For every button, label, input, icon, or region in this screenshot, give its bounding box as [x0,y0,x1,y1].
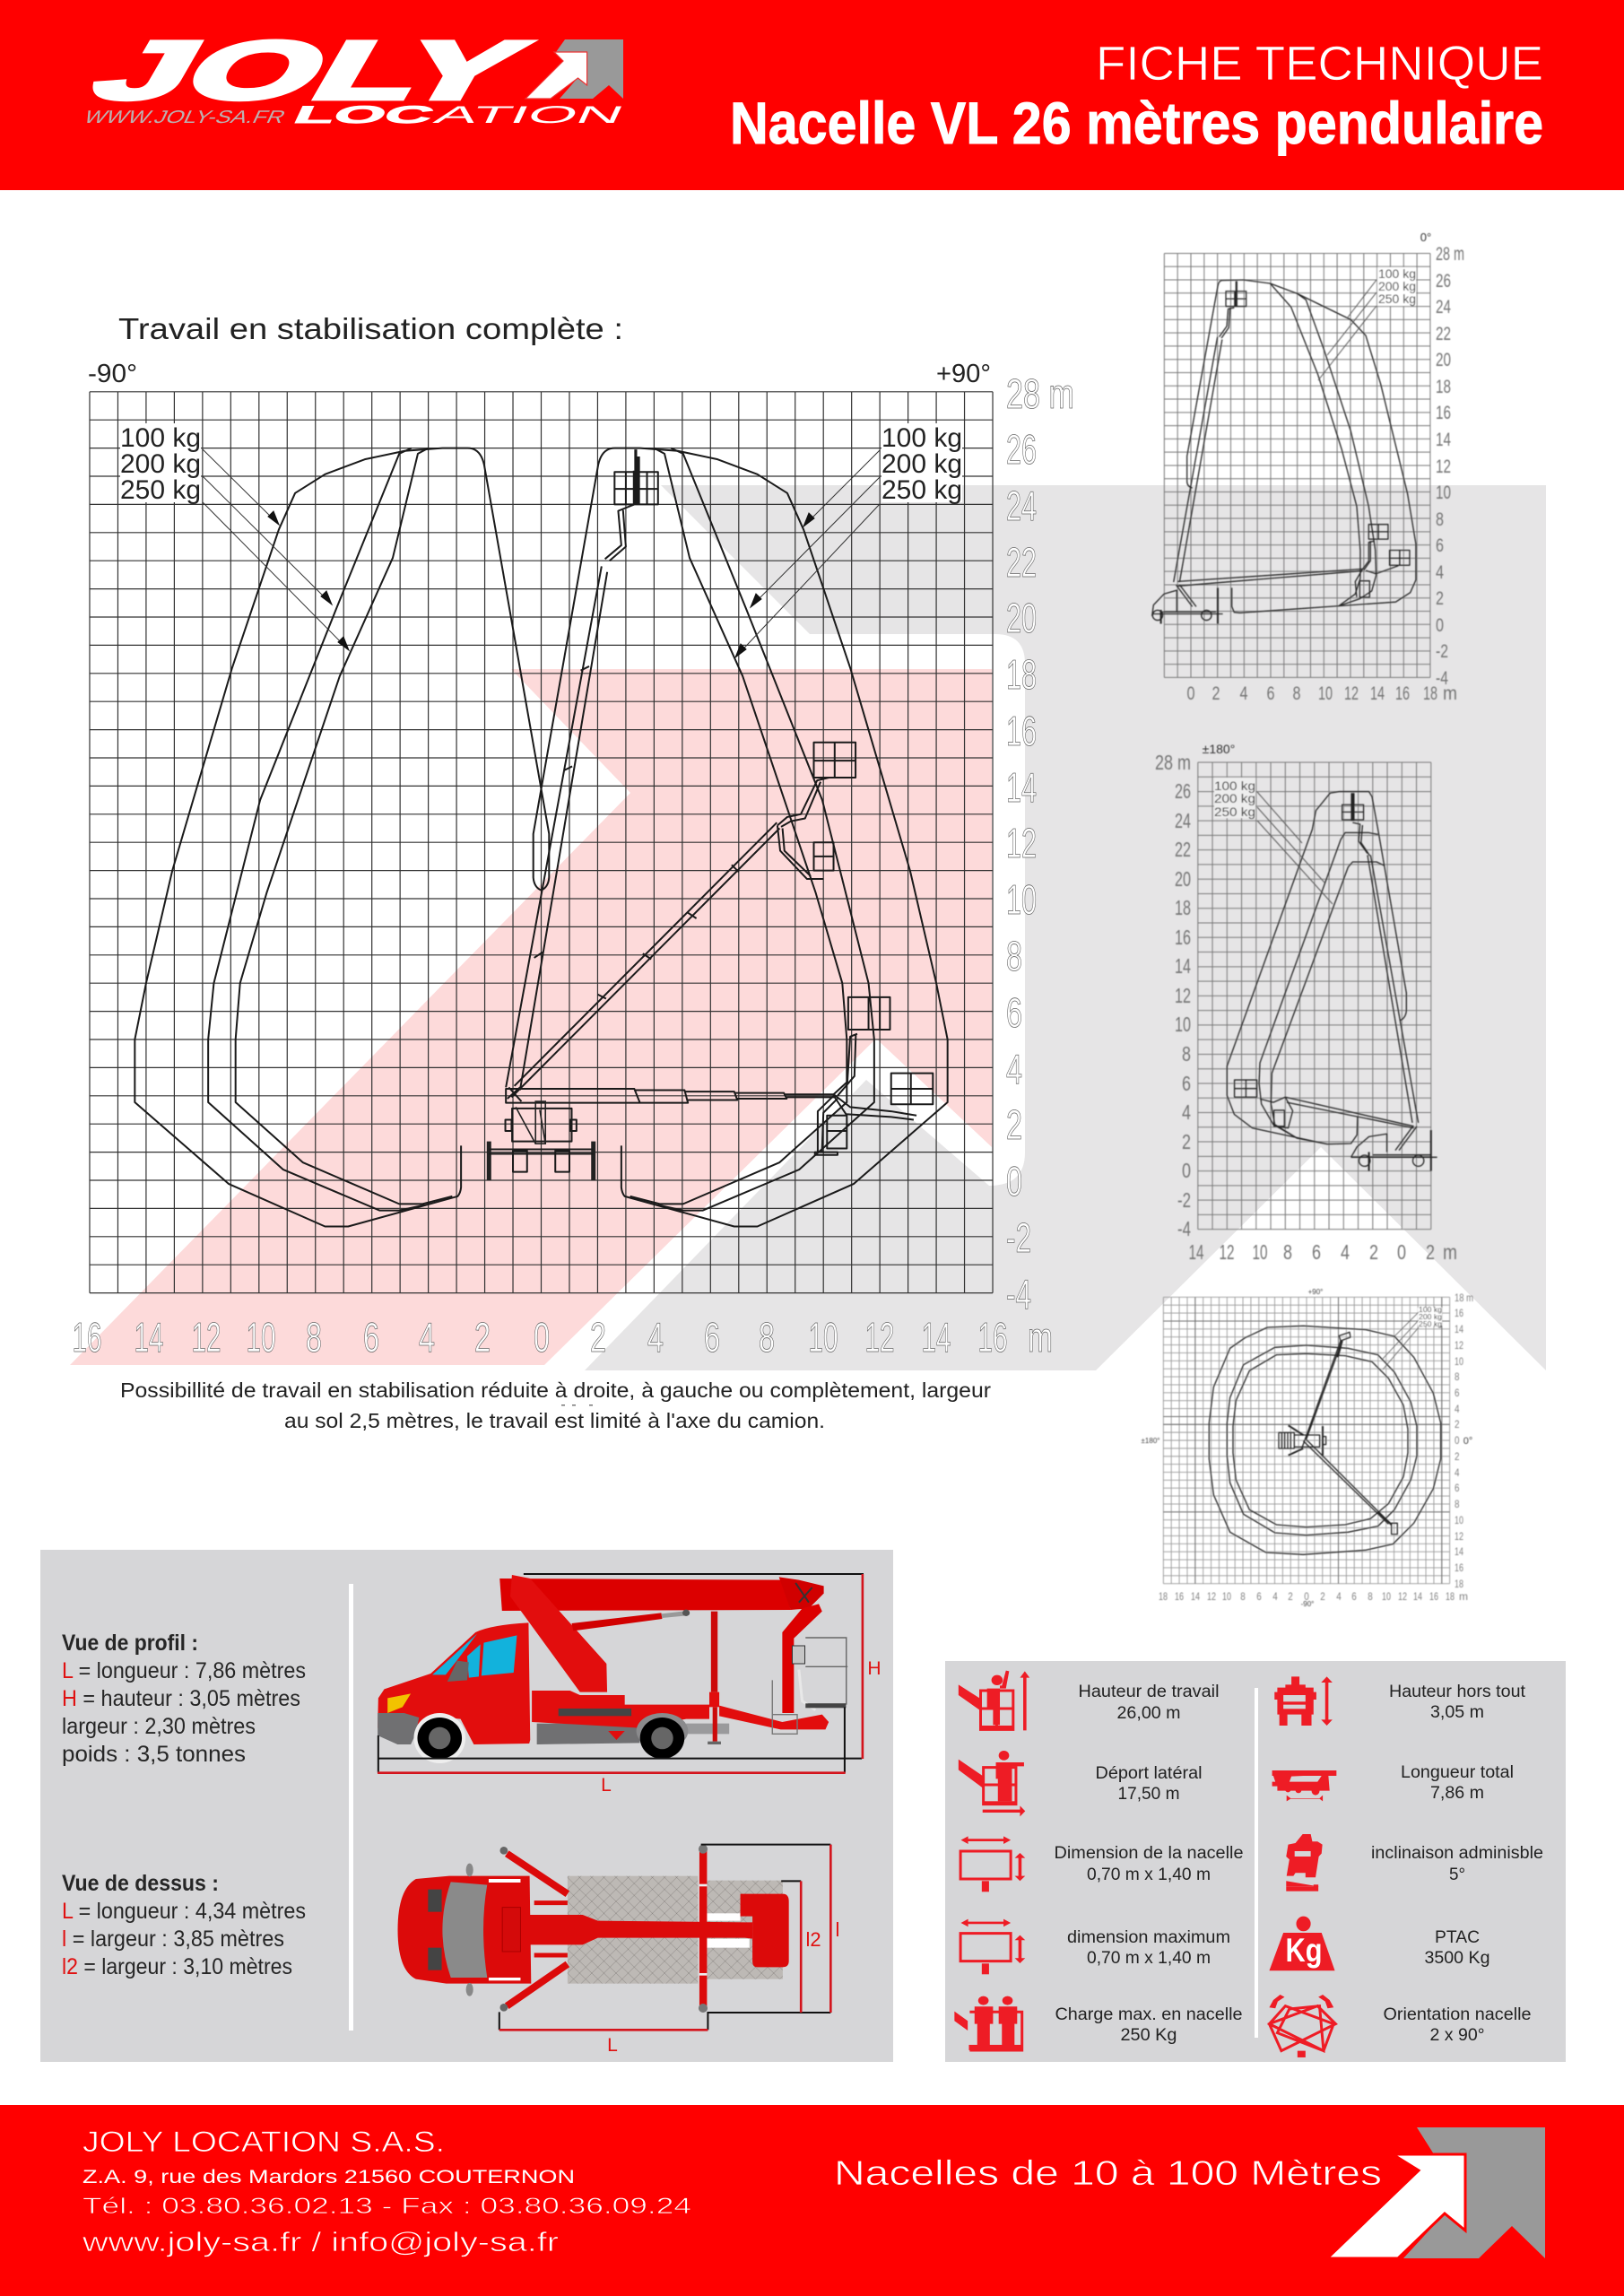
spec: deport lateral [1096,1764,1202,1804]
spec: hauteur de travail [1078,1683,1220,1723]
axis: distance labels main: 8 [759,1314,775,1361]
axis: height labels main: 2 [1006,1101,1022,1148]
axis labels: chart plan: 12 [1207,1590,1216,1603]
axis labels: chart 180 degree: 6 [1182,1072,1191,1095]
axis labels: chart 180 degree: 12 [1220,1240,1234,1264]
axis labels: chart 0 degree: 26 [1436,271,1451,291]
axis labels: chart 0 degree [1187,230,1464,704]
axis: height labels main: -2 [1006,1214,1031,1261]
axis labels: chart plan: 6 [1256,1590,1262,1603]
logo: LOC [289,101,439,129]
labels: kg chart 0 degree: 250 kg [1378,291,1416,306]
axis: height labels main: 4 [1006,1046,1022,1092]
axis: distance labels main: 16 [977,1314,1008,1361]
axis labels: chart 180 degree: 4 [1341,1240,1350,1264]
axis: height labels main: 22 [1006,539,1037,586]
axis labels: chart 0 degree: 0 [1436,615,1444,636]
company name: JOLY LOCATION S.A.S. [83,2126,445,2158]
axis: height labels main: 0 [1006,1158,1022,1205]
axis: distance labels main: 6 [363,1314,379,1361]
labels: kg chart plan: 100 kg [1419,1306,1442,1314]
axis labels: chart plan: 12 [1398,1590,1407,1603]
heading: travail en stabilisation: Travail en stabilisation complète : [118,312,623,345]
axis: distance labels main: 10 [246,1314,276,1361]
logo [75,25,629,129]
axis labels: chart 0 degree: 0° [1420,230,1431,244]
spec: hauteur de travail: 26,00 m [1117,1704,1180,1723]
axis labels: chart 0 degree: 10 [1436,483,1451,503]
axis labels: chart 0 degree: 2 [1436,588,1444,609]
axis labels: chart 0 degree: -2 [1436,641,1448,662]
phone and fax: Tél. : 03.80.36.02.13 - Fax : 03.80.36.09.24 [83,2194,691,2219]
main chart: working envelope [72,370,1074,1361]
axis labels: chart plan: 12 [1455,1530,1463,1543]
text: vue de dessus: l = largeur : 3,85 mètres [62,1926,284,1952]
axis labels: chart plan: 6 [1455,1482,1460,1494]
axis labels: chart 0 degree: 0 [1187,683,1194,704]
boom: vertical position [506,449,658,1091]
axis labels: chart 0 degree: 12 [1436,457,1451,477]
axis labels: chart 0 degree: 14 [1370,683,1385,704]
axis: height labels main: 14 [1006,764,1037,811]
axis: distance labels main: 14 [135,1314,163,1361]
axis: distance labels main: 4 [419,1314,435,1361]
labels: kg chart 0 degree: 100 kg [1378,266,1416,281]
axis labels: chart 0 degree: 24 [1436,297,1451,317]
text: vue de profil: poids : 3,5 tonnes [62,1742,246,1767]
axis labels: chart 0 degree: 18 [1436,377,1451,397]
axis labels: chart 180 degree: 6 [1312,1240,1321,1264]
envelope curves right [534,448,948,1226]
axis labels: chart plan: 8 [1455,1498,1460,1510]
labels: kg chart 180 degree: 250 kg [1214,804,1255,819]
spec: charge max: Charge max. en nacelle [1055,2005,1243,2024]
logo: WWW.JOLY-SA.FR [81,108,289,127]
axis labels: chart plan: 8 [1368,1590,1373,1603]
arrows: chart 180 degree [1257,792,1333,904]
spec: hauteur hors tout [1389,1683,1526,1722]
axis labels: chart plan: 14 [1191,1590,1200,1603]
background: pink chevron shape [70,669,992,1365]
axis: height labels main: 10 [1006,876,1037,923]
spec: dimension maximum: 0,70 m x 1,40 m [1087,1949,1211,1968]
dimension label L top: L [607,2035,618,2056]
axis: height labels main: 12 [1006,820,1037,866]
axis: distance labels main: 10 [809,1314,838,1361]
arrows: kg leaders [203,449,880,657]
axis labels: chart plan: 12 [1455,1339,1463,1352]
axis labels: chart plan: m [1459,1590,1468,1603]
labels: kg right: 200 kg [881,449,962,479]
chart: 180 degree side view [1155,742,1457,1264]
truck: side profile [378,1574,864,1773]
axis labels: chart 0 degree: 6 [1436,535,1444,556]
truck: top view [398,1845,830,2030]
web and mail: www.joly-sa.fr / info@joly-sa.fr [82,2226,559,2257]
slogan: Nacelles de 10 à 100 Mètres [834,2154,1382,2193]
dimension label l: l [836,1918,839,1941]
axis: height labels main [1006,370,1074,1318]
axis labels: chart 180 degree: 2 [1182,1130,1191,1153]
icon: total length [1272,1770,1336,1801]
axis labels: chart 0 degree: 6 [1266,683,1275,704]
labels: kg left: 250 kg [120,475,201,505]
axis: height labels main: 28 m [1006,370,1074,417]
axis labels: chart plan: 4 [1272,1590,1278,1603]
axis: distance labels main: 4 [647,1314,664,1361]
labels: kg right [881,423,962,505]
axis labels: chart plan: 2 [1288,1590,1293,1603]
axis labels: chart plan: 16 [1175,1590,1184,1603]
spec: dimension maximum [1067,1928,1230,1968]
axis: distance labels main: 12 [864,1314,895,1361]
axis labels: chart 0 degree: 16 [1395,683,1410,704]
spec: hauteur de travail: Hauteur de travail [1078,1683,1220,1701]
axis labels: chart 180 degree: 0 [1182,1159,1191,1182]
axis labels: chart 180 degree [1155,742,1457,1264]
icon: lateral reach [959,1751,1025,1816]
panel: vehicle dimensions [40,1550,893,2062]
spec: dimension maximum: dimension maximum [1067,1928,1230,1947]
title: fiche technique: FICHE TECHNIQUE [1096,37,1543,91]
axis labels: chart 180 degree: -4 [1177,1217,1191,1240]
axis labels: chart plan: 16 [1455,1561,1463,1574]
spec: charge max: 250 Kg [1121,2026,1177,2045]
axis labels: chart 180 degree: 24 [1175,809,1191,832]
axis labels: chart plan: 10 [1382,1590,1391,1603]
spec: orientation: Orientation nacelle [1383,2005,1532,2024]
axis labels: chart 180 degree: 2 [1369,1240,1378,1264]
axis labels: chart plan: 6 [1351,1590,1357,1603]
axis labels: chart 0 degree: 8 [1293,683,1300,704]
axis labels: chart plan: 10 [1455,1355,1463,1368]
axis: distance labels main: m [1028,1314,1053,1361]
axis labels: chart plan: 10 [1222,1590,1231,1603]
axis labels: chart 180 degree: 14 [1189,1240,1204,1264]
spec: inclinaison: inclinaison adminisble [1371,1844,1543,1863]
axis labels: chart plan: 18 [1446,1590,1455,1603]
axis labels: chart 0 degree: 22 [1436,324,1451,344]
dimension lines top [499,1845,830,2030]
label: -90 degrees: -90° [88,360,137,388]
labels: kg chart 180 degree: 100 kg [1214,778,1255,793]
axis labels: chart plan [1142,1288,1473,1608]
text: vue de dessus: Vue de dessus : [62,1871,219,1896]
spec: ptac [1424,1928,1490,1968]
axis labels: chart plan: 4 [1455,1403,1460,1415]
text: vue de dessus: l2 = largeur : 3,10 mètres [62,1954,292,1979]
axis: height labels main: -4 [1006,1271,1031,1318]
spec: longueur total: 7,86 m [1430,1784,1484,1803]
axis: distance labels main: 14 [922,1314,951,1361]
dimension label H: H [867,1658,881,1679]
axis labels: chart plan: 4 [1455,1466,1460,1479]
axis: height labels main: 8 [1006,933,1022,979]
labels: kg left [120,423,201,505]
axis labels: chart 0 degree: 14 [1436,430,1451,450]
text: vue de profil: L = longueur : 7,86 mètres [62,1658,306,1683]
dimension lines profile [378,1574,864,1773]
axis labels: chart plan: 16 [1455,1307,1463,1319]
axis labels: chart 0 degree: m [1443,683,1457,704]
axis labels: chart plan: 0 [1455,1434,1460,1447]
axis: distance labels main: 2 [474,1314,491,1361]
text: vue de profil: Vue de profil : [62,1631,198,1656]
text: vue de profil: H = hauteur : 3,05 mètres [62,1686,300,1711]
header band [0,0,1624,190]
axis labels: chart 180 degree: 10 [1175,1013,1191,1036]
axis: height labels main: 18 [1006,651,1037,698]
axis labels: chart plan: ±180° [1142,1437,1159,1445]
axis: distance labels main [72,1314,1053,1361]
axis: distance labels main: 0 [534,1314,550,1361]
axis labels: chart plan: 8 [1455,1370,1460,1383]
spec: inclinaison [1371,1844,1543,1884]
truck [1152,585,1223,624]
axis labels: chart 180 degree: ±180° [1203,742,1235,756]
axis labels: chart 0 degree: 12 [1344,683,1359,704]
arrows: chart plan [1383,1312,1419,1370]
label: +90 degrees: +90° [936,360,991,388]
axis: distance labels main: 12 [192,1314,221,1361]
icon: inclination [1286,1834,1323,1892]
spec: longueur total: Longueur total [1401,1763,1514,1782]
spec: ptac: PTAC [1435,1928,1480,1947]
spec: deport lateral: 17,50 m [1117,1785,1180,1804]
truck rear view [489,1101,594,1180]
axis labels: chart 180 degree: 2 [1426,1240,1435,1264]
labels: kg chart plan: 200 kg [1419,1313,1442,1321]
labels: kg right: 100 kg [881,423,962,453]
arrows: chart 0 degree [1318,280,1376,380]
labels: kg left: 100 kg [120,423,201,453]
text: vue de profil: largeur : 2,30 mètres [62,1714,256,1739]
axis labels: chart 0 degree: 28 m [1436,244,1464,265]
panel: specifications [945,1661,1566,2062]
axis labels: chart plan: +90° [1308,1288,1323,1296]
labels: kg chart plan [1418,1306,1442,1328]
title: nacelle: Nacelle VL 26 mètres pendulaire [730,90,1543,156]
axis labels: chart plan: 18 [1159,1590,1168,1603]
spec: orientation [1383,2005,1532,2045]
axis labels: chart 180 degree: 14 [1175,954,1191,978]
axis: distance labels main: 16 [72,1314,102,1361]
axis labels: chart 180 degree: 22 [1175,838,1191,861]
axis labels: chart plan: 2 [1455,1450,1460,1463]
axis labels: chart plan: 0 [1304,1590,1309,1603]
logo: JOLY [75,25,543,117]
axis: distance labels main: 2 [590,1314,606,1361]
axis labels: chart plan: 18 [1455,1578,1463,1590]
labels: kg chart 0 degree: 200 kg [1378,279,1416,293]
icon: overall height [1274,1676,1333,1726]
axis: height labels main: 16 [1006,708,1037,754]
spec: charge max [1055,2005,1243,2045]
axis labels: chart 180 degree: 0 [1397,1240,1406,1264]
text: Kg on weight icon: Kg [1286,1932,1322,1969]
text: vue de dessus: L = longueur : 4,34 mètres [62,1899,306,1924]
caption: stabilisation note: Possibillité de travail en stabilisation réduite à droite, à gauche ou complètement, largeur [120,1378,991,1402]
labels: kg chart 0 degree [1377,266,1416,306]
axis labels: chart 0 degree: 4 [1239,683,1248,704]
spec: dimension nacelle [1055,1844,1243,1884]
axis labels: chart plan: 4 [1336,1590,1342,1603]
axis: height labels main: 20 [1006,595,1037,641]
icon: weight [1269,1917,1335,1970]
background: grey chevron shape [585,485,1546,1370]
text: vue de profil [62,1631,306,1767]
axis: distance labels main: 8 [306,1314,322,1361]
axis labels: chart 180 degree: 4 [1182,1100,1191,1124]
axis labels: chart 0 degree: 18 [1423,683,1437,704]
labels: kg chart 180 degree [1214,778,1255,819]
spec: dimension nacelle: 0,70 m x 1,40 m [1087,1866,1211,1884]
icon: maximum dimension [960,1919,1025,1974]
axis labels: chart 0 degree: 16 [1436,403,1451,423]
icon: max load persons [954,1996,1023,2050]
icon: platform dimension [960,1836,1025,1892]
axis labels: chart 0 degree: 4 [1436,562,1444,583]
footer band [0,2105,1624,2296]
booms and truck in plan [1279,1332,1397,1535]
axis labels: chart plan: 6 [1455,1387,1460,1399]
spec: dimension nacelle: Dimension de la nacelle [1055,1844,1243,1863]
axis: height labels main: 26 [1006,426,1037,473]
axis labels: chart 0 degree: 20 [1436,350,1451,370]
axis labels: chart 180 degree: 12 [1175,984,1191,1007]
envelope curves left [135,448,549,1226]
boom: horizontal position [506,997,933,1155]
axis labels: chart 180 degree: 8 [1182,1042,1191,1065]
axis labels: chart 180 degree: 16 [1175,926,1191,949]
spec: orientation: 2 x 90° [1429,2026,1485,2045]
axis labels: chart plan: 2 [1320,1590,1325,1603]
axis labels: chart 180 degree: -2 [1177,1188,1191,1212]
text: vue de dessus [62,1871,306,1979]
axis labels: chart plan: 16 [1429,1590,1438,1603]
icon: working height [959,1671,1029,1730]
truck [1351,1126,1437,1171]
labels: kg chart plan: 250 kg [1419,1320,1442,1328]
spec: ptac: 3500 Kg [1424,1949,1490,1968]
axis labels: chart plan: 0° [1463,1436,1472,1447]
icon: orientation [1269,1995,1335,2057]
chart: 0 degree side view [1152,230,1464,704]
spec: hauteur hors tout: 3,05 m [1430,1703,1484,1722]
spec: inclinaison: 5° [1449,1866,1465,1884]
axis labels: chart 0 degree: -4 [1436,668,1448,689]
spec: deport lateral: Déport latéral [1096,1764,1202,1783]
axis labels: chart 180 degree: 8 [1283,1240,1292,1264]
caption: stabilisation note: au sol 2,5 mètres, le travail est limité à l'axe du camion. [284,1409,825,1432]
icon: logo arrow [1327,2127,1545,2258]
axis labels: chart plan: 14 [1455,1545,1463,1558]
labels: kg right: 250 kg [881,475,962,505]
address: Z.A. 9, rue des Mardors 21560 COUTERNON [83,2167,575,2187]
caption: stabilisation note [120,1378,991,1432]
axis: height labels main: 24 [1006,483,1037,529]
boom: diagonal position [511,743,855,1097]
axis labels: chart 0 degree: 8 [1436,509,1444,530]
axis: height labels main: 6 [1006,989,1022,1036]
axis labels: chart 180 degree: m [1443,1240,1457,1264]
axis labels: chart plan: 14 [1455,1323,1463,1335]
icons: spec pictograms [954,1671,1336,2057]
dimension label L profile: L [601,1775,612,1796]
spec: longueur total [1401,1763,1514,1803]
axis labels: chart plan: 8 [1240,1590,1246,1603]
axis labels: chart 180 degree: 18 [1175,896,1191,919]
logo: ATION [430,101,629,129]
labels: kg left: 200 kg [120,449,201,479]
dimension label l2: l2 [805,1928,821,1951]
spec: hauteur hors tout: Hauteur hors tout [1389,1683,1526,1701]
axis labels: chart plan: 10 [1455,1514,1463,1526]
axis labels: chart plan: 2 [1455,1418,1460,1431]
axis labels: chart 180 degree: 28 m [1155,751,1191,774]
axis labels: chart 180 degree: 26 [1175,779,1191,803]
labels: kg chart 180 degree: 200 kg [1214,791,1255,805]
axis labels: chart plan: -90° [1301,1600,1314,1608]
axis labels: chart 0 degree: 2 [1212,683,1220,704]
axis labels: chart 180 degree: 20 [1175,867,1191,891]
axis labels: chart plan: 18 m [1455,1292,1473,1304]
axis labels: chart 0 degree: 10 [1318,683,1333,704]
axis labels: chart plan: 14 [1413,1590,1422,1603]
chart: plan view [1142,1288,1473,1608]
axis labels: chart 180 degree: 10 [1252,1240,1268,1264]
axis: distance labels main: 6 [704,1314,720,1361]
